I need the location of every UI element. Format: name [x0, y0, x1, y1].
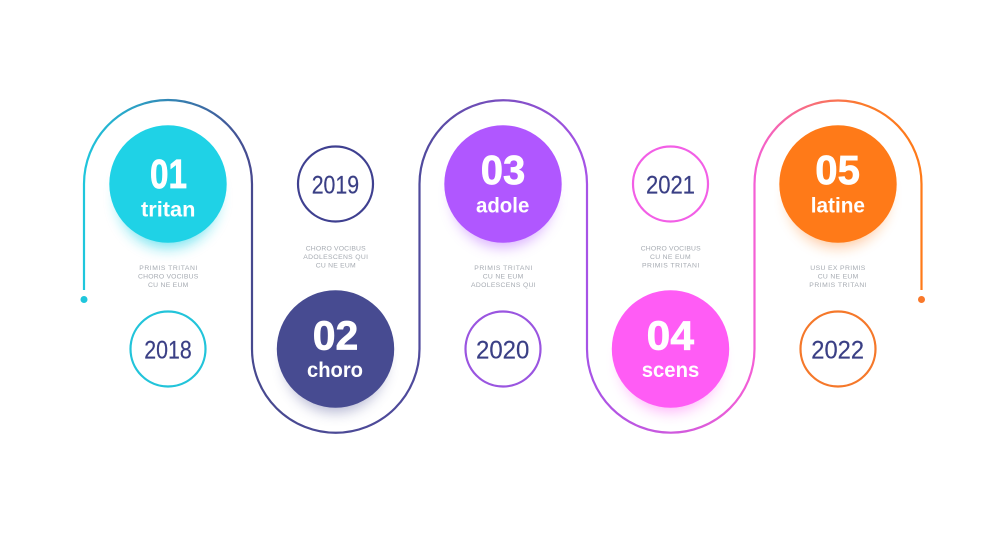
caption 04: PRIMIS TRITANI — [642, 262, 699, 270]
label latine: latine — [811, 195, 865, 218]
step 01 — [109, 125, 227, 248]
label adole: adole — [476, 195, 529, 218]
step 03 — [444, 125, 562, 247]
year 2018 — [130, 312, 206, 386]
label tritan: tritan — [141, 198, 196, 222]
year 2019: 2019 — [312, 171, 359, 199]
caption 05: USU EX PRIMIS — [810, 265, 866, 272]
step 02 — [277, 290, 394, 412]
caption 02: CHORO VOCIBUS — [306, 246, 366, 252]
caption 01: CHORO VOCIBUS — [138, 274, 199, 280]
caption 04: CU NE EUM — [650, 254, 691, 261]
caption 05: CU NE EUM — [818, 274, 859, 280]
year 2020: 2020 — [476, 336, 529, 364]
number 02: 02 — [313, 312, 358, 358]
year 2018: 2018 — [144, 336, 192, 364]
year 2019 — [298, 146, 373, 222]
caption 02: CU NE EUM — [316, 262, 356, 270]
caption 03 — [471, 265, 536, 289]
number 05: 05 — [815, 147, 860, 193]
timeline connector line — [80, 100, 925, 433]
year 2021: 2021 — [646, 171, 695, 199]
number 04: 04 — [647, 312, 694, 358]
caption 01 — [138, 265, 199, 289]
caption 01: PRIMIS TRITANI — [139, 265, 197, 272]
caption 04 — [641, 246, 701, 270]
year 2021 — [633, 146, 708, 222]
caption 04: CHORO VOCIBUS — [641, 246, 701, 252]
year 2022: 2022 — [811, 336, 864, 364]
label scens: scens — [642, 359, 699, 382]
caption 01: CU NE EUM — [148, 282, 189, 289]
label choro: choro — [307, 359, 363, 382]
caption 03: CU NE EUM — [483, 274, 524, 280]
number 01: 01 — [150, 151, 187, 197]
caption 05: PRIMIS TRITANI — [809, 282, 867, 289]
caption 03: PRIMIS TRITANI — [474, 265, 532, 272]
caption 03: ADOLESCENS QUI — [471, 282, 536, 289]
caption 02 — [303, 246, 368, 270]
year 2022 — [800, 312, 876, 386]
number 03: 03 — [481, 147, 525, 193]
step 04 — [612, 290, 729, 412]
caption 05 — [809, 265, 867, 289]
year 2020 — [466, 312, 540, 386]
step 05 — [779, 125, 897, 247]
caption 02: ADOLESCENS QUI — [303, 254, 368, 261]
